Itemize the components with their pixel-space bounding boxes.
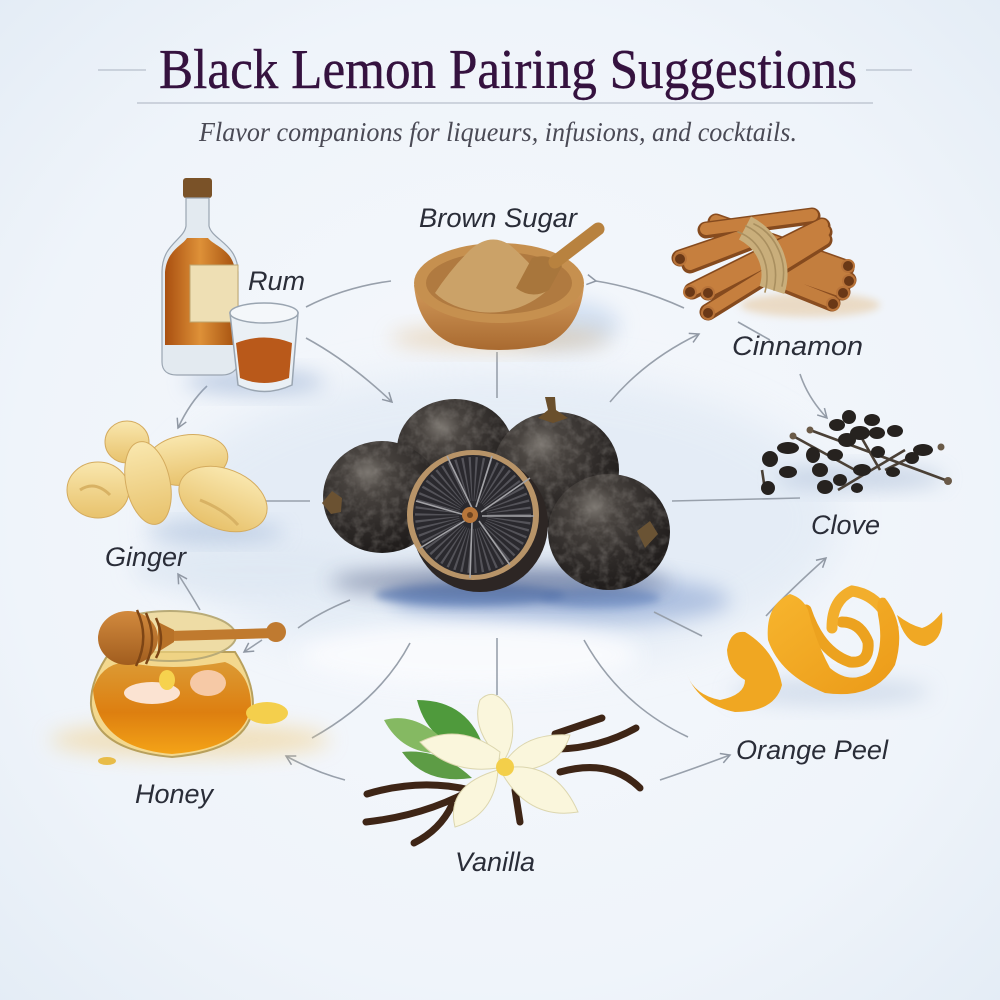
title rules	[98, 70, 912, 103]
label: Brown Sugar: Brown Sugar	[419, 203, 578, 233]
item: rum	[162, 178, 325, 394]
upper bundle	[674, 215, 824, 319]
label: Cinnamon: Cinnamon	[732, 331, 863, 361]
item: vanilla	[366, 694, 640, 877]
icon: ginger root	[67, 421, 277, 544]
subtitle: Flavor companions for liqueurs, infusions, and cocktails.	[198, 117, 797, 147]
label: Vanilla: Vanilla	[455, 847, 535, 877]
item: ginger	[67, 421, 285, 572]
back band	[806, 610, 868, 662]
icon: vanilla flower	[420, 694, 578, 827]
icon: honey jar	[91, 611, 288, 765]
icon: rum glass	[230, 303, 298, 392]
back lemon left	[397, 399, 513, 499]
icon: twine	[745, 228, 774, 290]
left curl	[687, 632, 782, 712]
icon: black lemons	[322, 397, 670, 598]
label: Rum: Rum	[248, 266, 305, 296]
item: cinnamon	[674, 215, 880, 361]
label: Ginger: Ginger	[105, 542, 187, 572]
title: Black Lemon Pairing Suggestions	[159, 39, 857, 101]
label: Honey: Honey	[135, 779, 215, 809]
icon: rum bottle	[162, 178, 238, 375]
item: orange peel	[687, 591, 942, 765]
right lemon	[548, 474, 670, 590]
title block	[98, 39, 912, 147]
icon: cloves	[761, 410, 952, 495]
label: Clove: Clove	[811, 510, 880, 540]
lower bundle	[716, 221, 855, 310]
icon: cinnamon sticks	[674, 215, 855, 319]
icon: wooden bowl	[414, 229, 598, 350]
watercolor wash	[130, 300, 840, 687]
item: brown sugar	[390, 203, 610, 350]
item: honey	[50, 610, 330, 809]
connector arrows	[178, 281, 827, 780]
label: Orange Peel: Orange Peel	[736, 735, 889, 765]
right tail	[897, 612, 942, 646]
icon: vanilla pods	[366, 718, 640, 843]
item: clove	[761, 410, 952, 540]
left lemon	[322, 441, 441, 553]
icon: scoop	[516, 256, 562, 295]
cut lemon	[407, 450, 548, 592]
icon: leaves	[384, 700, 485, 779]
back lemon right	[493, 397, 619, 528]
inner loop	[832, 591, 893, 628]
main band	[768, 594, 899, 694]
icon: flower centre	[496, 758, 514, 776]
icon: honey dipper	[98, 610, 286, 666]
icon: orange peel	[687, 591, 942, 712]
